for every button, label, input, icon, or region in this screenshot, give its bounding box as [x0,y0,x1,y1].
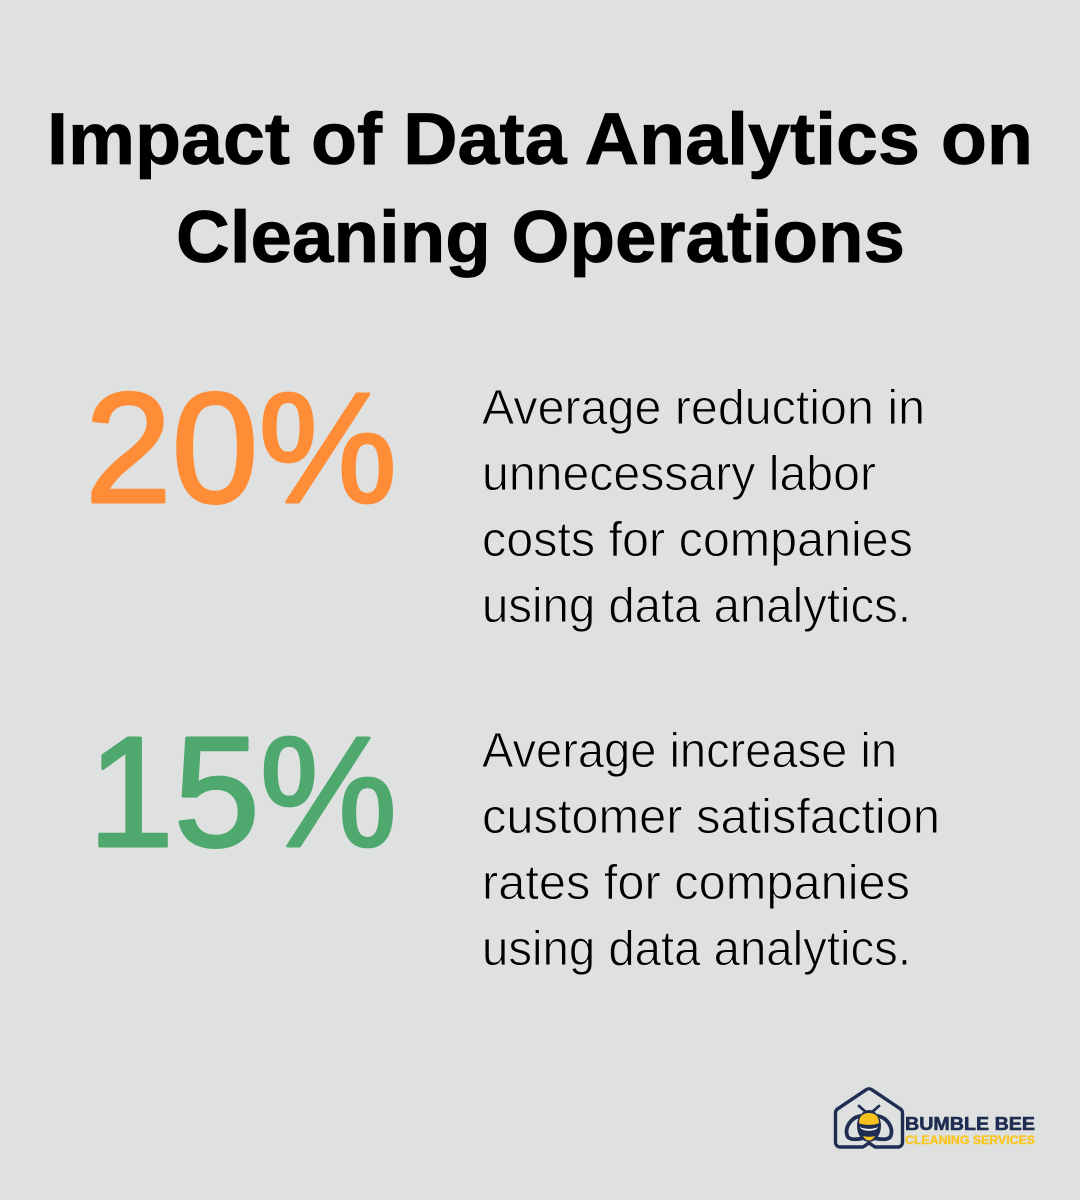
text block: labor cost reduction: costs for companies [482,512,913,567]
title: Cleaning Operations [176,197,905,278]
logo wordmark: CLEANING SERVICES [905,1135,1035,1147]
text block: customer satisfaction: using data analytics. [482,921,911,976]
logo wordmark [905,1113,1035,1147]
stat: 20%: 20% [85,361,397,536]
title [47,99,1033,278]
text block: labor cost reduction: unnecessary labor [482,446,876,501]
logo: Bumble Bee Cleaning Services [835,1089,1035,1147]
icon: house outline with bee [835,1089,903,1147]
text block: customer satisfaction [482,723,940,976]
text block: labor cost reduction: Average reduction in [482,380,925,435]
stat: 15%: 15% [88,705,397,880]
text block: customer satisfaction: Average increase in [482,723,897,778]
text block: customer satisfaction: rates for companies [482,855,910,910]
text block: labor cost reduction [482,380,925,633]
logo wordmark: BUMBLE BEE [905,1113,1035,1134]
title: Impact of Data Analytics on [47,99,1033,180]
text block: customer satisfaction: customer satisfaction [482,789,940,844]
text block: labor cost reduction: using data analytics. [482,578,911,633]
